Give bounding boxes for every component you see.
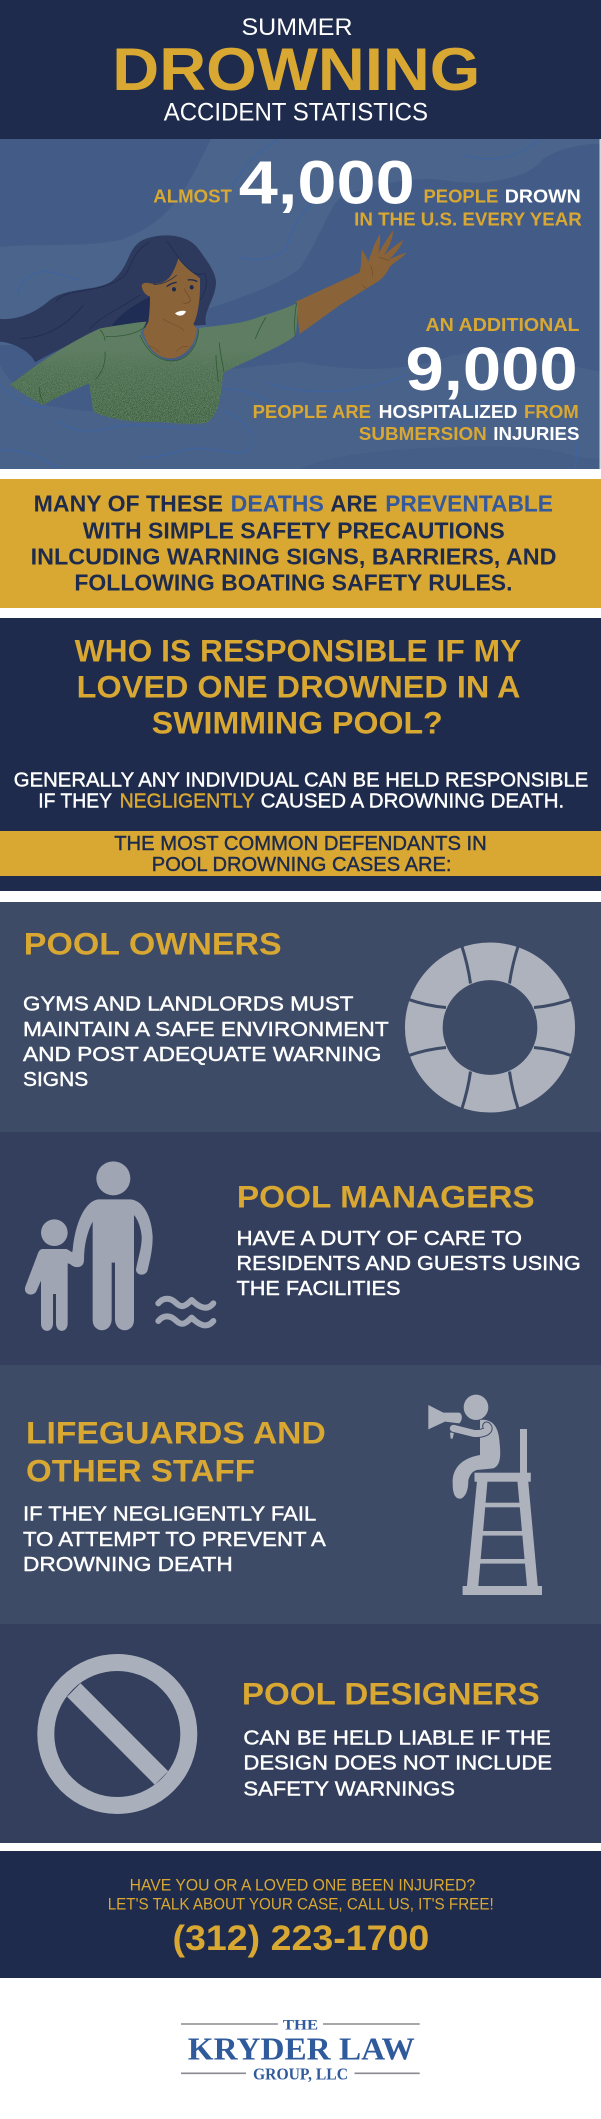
heading: lifeguards and other staff: OTHER STAFF xyxy=(26,1453,255,1489)
icon: adult, child and water xyxy=(25,1161,213,1331)
title: accident statistics: ACCIDENT STATISTICS xyxy=(164,100,428,127)
heading: who is responsible: LOVED ONE DROWNED IN A xyxy=(77,668,520,704)
text: pool designers: SAFETY WARNINGS xyxy=(243,1779,455,1801)
text: pool owners: AND POST ADEQUATE WARNING xyxy=(23,1044,381,1066)
statistic: 9,000: AN ADDITIONAL xyxy=(426,314,580,335)
text: lifeguards: IF THEY NEGLIGENTLY FAIL xyxy=(23,1504,316,1526)
icon: prohibition sign xyxy=(46,1662,189,1806)
illustration: drowning woman xyxy=(0,230,407,433)
statistic: 4,000: ALMOST xyxy=(153,186,233,207)
shirt speckle xyxy=(10,358,253,424)
panel: call to action xyxy=(0,1851,601,1978)
statistic: 9,000: FROM xyxy=(524,401,579,422)
arm and hand xyxy=(296,230,407,334)
water background shapes xyxy=(0,139,601,469)
panel: prevention callout: MANY OF THESE xyxy=(34,491,223,517)
statistic: 9,000: HOSPITALIZED xyxy=(379,401,517,422)
statistic: 4,000: IN THE U.S. EVERY YEAR xyxy=(354,208,582,229)
heading: pool owners: POOL OWNERS xyxy=(24,925,282,961)
statistic: 9,000 xyxy=(253,314,580,444)
text: pool owners: GYMS AND LANDLORDS MUST xyxy=(23,994,353,1016)
statistic: 4,000: 4,000 xyxy=(239,148,415,217)
panel: pool owners xyxy=(0,902,601,1132)
statistic: 9,000: PEOPLE ARE xyxy=(253,401,371,422)
panel: prevention callout: ARE xyxy=(330,491,378,517)
statistic: 9,000: 9,000 xyxy=(406,335,578,404)
text: pool managers: HAVE A DUTY OF CARE TO xyxy=(236,1228,522,1250)
panel: prevention callout: INLCUDING WARNING SIGNS, BARRIERS, AND xyxy=(31,544,556,570)
text: general responsibility: CAUSED A DROWNING DEATH. xyxy=(261,791,564,813)
shirt xyxy=(10,302,298,424)
statistic: 9,000: INJURIES xyxy=(493,423,580,444)
text: pool owners: SIGNS xyxy=(23,1069,88,1091)
heading: lifeguards and other staff xyxy=(26,1414,326,1489)
heading: who is responsible: WHO IS RESPONSIBLE IF MY xyxy=(75,633,521,669)
banner: most common defendants: POOL DROWNING CASES ARE: xyxy=(152,854,452,876)
statistic: 4,000: PEOPLE xyxy=(424,186,498,207)
icon: lifeguard on chair with megaphone xyxy=(428,1395,542,1595)
panel: pool designers xyxy=(0,1624,601,1843)
logo: the kryder law group: GROUP, LLC xyxy=(253,2064,348,2083)
title: drowning: DROWNING xyxy=(112,35,480,103)
heading: lifeguards and other staff: LIFEGUARDS AND xyxy=(26,1414,326,1450)
text: pool designers xyxy=(243,1728,552,1801)
text: pool owners: MAINTAIN A SAFE ENVIRONMENT xyxy=(23,1019,389,1041)
logo: the kryder law group: KRYDER LAW xyxy=(188,2030,415,2066)
banner: most common defendants: THE MOST COMMON DEFENDANTS IN xyxy=(114,833,487,855)
text: pool managers: THE FACILITIES xyxy=(236,1278,400,1300)
text: pool designers: CAN BE HELD LIABLE IF THE xyxy=(243,1728,551,1750)
heading: pool designers: POOL DESIGNERS xyxy=(242,1675,540,1711)
banner: most common defendants xyxy=(0,831,601,876)
text: lifeguards xyxy=(23,1504,326,1576)
text: pool managers xyxy=(236,1228,581,1300)
panel: call to action: HAVE YOU OR A LOVED ONE BEEN INJURED? xyxy=(130,1876,475,1895)
logo: the kryder law group xyxy=(181,2017,420,2083)
panel: prevention callout xyxy=(0,479,601,608)
panel: prevention callout: DEATHS xyxy=(231,491,324,517)
panel: prevention callout: FOLLOWING BOATING SAFETY RULES. xyxy=(74,570,513,596)
statistic: 9,000: SUBMERSION xyxy=(359,423,487,444)
heading: pool managers: POOL MANAGERS xyxy=(237,1178,535,1214)
text: pool managers: RESIDENTS AND GUESTS USING xyxy=(236,1253,581,1275)
text: lifeguards: TO ATTEMPT TO PREVENT A xyxy=(23,1529,326,1551)
hair xyxy=(0,235,216,362)
text: pool designers: DESIGN DOES NOT INCLUDE xyxy=(243,1752,552,1774)
text: lifeguards: DROWNING DEATH xyxy=(23,1554,233,1576)
panel: prevention callout: PREVENTABLE xyxy=(385,491,553,517)
panel: pool managers xyxy=(0,1132,601,1365)
phone number: (312) 223-1700 xyxy=(172,1918,429,1958)
heading: who is responsible: SWIMMING POOL? xyxy=(152,704,443,740)
panel: header xyxy=(0,0,601,139)
panel: lifeguards xyxy=(0,1365,601,1624)
title: summer: SUMMER xyxy=(242,14,352,41)
logo: the kryder law group: THE xyxy=(283,2017,318,2033)
face and neck xyxy=(142,258,200,358)
text: general responsibility: NEGLIGENTLY xyxy=(120,791,255,813)
statistic: 4,000: DROWN xyxy=(505,186,581,207)
heading: who is responsible xyxy=(75,633,521,740)
panel: prevention callout: WITH SIMPLE SAFETY PRECAUTIONS xyxy=(83,517,505,543)
text: general responsibility: IF THEY xyxy=(38,791,112,813)
icon: life ring xyxy=(407,944,573,1111)
panel: hero illustration and statistics xyxy=(0,139,601,469)
text: pool owners xyxy=(23,994,389,1091)
text: general responsibility: GENERALLY ANY INDIVIDUAL CAN BE HELD RESPONSIBLE xyxy=(14,770,588,792)
statistic: 4,000 xyxy=(153,148,582,229)
text: general responsibility xyxy=(14,770,588,813)
panel: call to action: LET'S TALK ABOUT YOUR CASE, CALL US, IT'S FREE! xyxy=(108,1895,494,1914)
panel: who is responsible xyxy=(0,618,601,891)
facial features xyxy=(150,280,197,353)
